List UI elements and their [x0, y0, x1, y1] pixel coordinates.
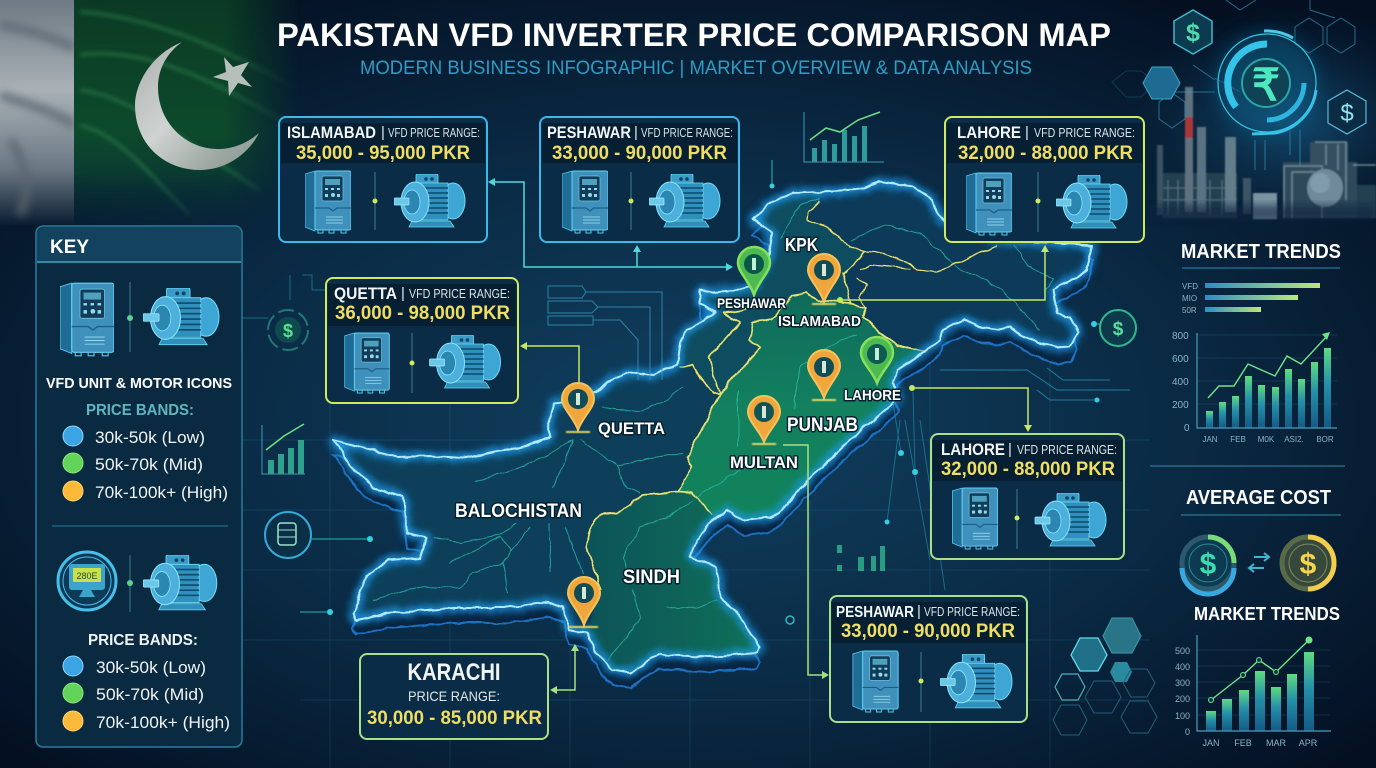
flag of Pakistan: [0, 0, 290, 224]
panel: Quetta prices: [326, 278, 518, 403]
small chart left: [262, 424, 305, 474]
map depth shadow: [333, 197, 1093, 688]
map labels: ISLAMABAD: [778, 313, 861, 330]
province: Balochistan: [333, 363, 720, 630]
bar and line chart: trends one: [1172, 331, 1337, 444]
panel: Karachi prices: PRICE RANGE:: [408, 688, 500, 704]
panel: Lahore prices (top): [945, 117, 1144, 242]
map pin: Karachi: [568, 577, 600, 628]
Lahore top connector: [840, 250, 1045, 300]
panel: Quetta prices: 36,000 - 98,000 PKR: [335, 303, 510, 324]
panel: Lahore prices (top): |: [1025, 124, 1029, 141]
map pin: Peshawar: [738, 247, 770, 295]
panel: Lahore prices (middle): VFD PRICE RANGE:: [1017, 442, 1117, 457]
map pin: Quetta: [562, 383, 594, 433]
panel: Quetta prices: |: [401, 285, 405, 302]
panel: Islamabad prices: [279, 117, 487, 242]
northern areas: [333, 182, 1093, 673]
bar and line chart: trends two: 0: [1185, 727, 1190, 737]
small decorative bars: [837, 545, 885, 571]
price bands legend two: 30k-50k (Low): [96, 658, 206, 677]
map labels: SINDH: [623, 567, 680, 588]
price bands legend one: 50k-70k (Mid): [95, 455, 203, 474]
panel: Karachi prices: 30,000 - 85,000 PKR: [367, 708, 542, 729]
dark hexagon filled: [1143, 67, 1180, 99]
dollar hexagon top: $: [1186, 19, 1200, 47]
map labels: PUNJAB: [787, 415, 858, 436]
bar and line chart: trends one: 600: [1172, 354, 1189, 365]
icon: dollar badge left: $: [283, 321, 293, 341]
map pin: Multan: [748, 396, 780, 445]
horizontal bar chart: MIO: [1182, 294, 1197, 303]
rivers: [373, 198, 1053, 660]
bar and line chart: trends two: 200: [1175, 694, 1190, 704]
map pin: Islamabad: [808, 254, 840, 305]
arrows: exchange: [1249, 553, 1269, 572]
panel: Islamabad prices: ISLAMABAD: [287, 123, 376, 142]
horizontal bar chart: [1182, 268, 1340, 315]
icon: dollar badge right: $: [1113, 319, 1124, 340]
icons: VFD and motor: [60, 282, 219, 356]
panel: Lahore prices (middle): [931, 434, 1124, 559]
dollar hexagon right: $: [1340, 100, 1354, 127]
price bands legend two: PRICE BANDS:: [88, 632, 198, 649]
bar and line chart: trends one: ASI2.: [1284, 435, 1304, 444]
bar and line chart: trends two: APR: [1299, 738, 1318, 748]
panel: Peshawar prices (lower): PESHAWAR: [836, 604, 914, 621]
connector lines and arrows: [240, 160, 1130, 694]
title: PAKISTAN VFD INVERTER PRICE COMPARISON MAP: [277, 17, 1111, 53]
Peshawar lower connector: [783, 445, 824, 675]
map labels: LAHORE: [844, 387, 901, 404]
bar and line chart: trends one: BOR: [1316, 435, 1334, 444]
dollar hexagon top: [1174, 10, 1212, 54]
bar and line chart: trends two: [1175, 635, 1331, 748]
coin: low cost: $: [1200, 548, 1217, 581]
province boundaries: [587, 200, 997, 590]
panel: Lahore prices (top): LAHORE: [957, 123, 1021, 142]
panel: Lahore prices (middle): 32,000 - 88,000 PKR: [941, 459, 1115, 480]
Islamabad and Peshawar connector: [492, 182, 727, 267]
coin: low cost: [1182, 537, 1234, 594]
price bands legend one: 70k-100k+ (High): [95, 483, 228, 502]
bar and line chart: trends one: 400: [1172, 377, 1189, 388]
subtitle: MODERN BUSINESS INFOGRAPHIC | MARKET OVERVIEW & DATA ANALYSIS: [360, 58, 1032, 79]
price bands legend two: [63, 632, 230, 732]
horizontal bar chart: 50R: [1182, 306, 1197, 315]
price bands legend two: 70k-100k+ (High): [96, 713, 230, 732]
bar and line chart: trends two: 100: [1175, 711, 1190, 721]
price bands legend two: 50k-70k (Mid): [96, 685, 204, 704]
map labels: QUETTA: [598, 419, 665, 438]
price bands legend one: 30k-50k (Low): [95, 428, 205, 447]
province: KPK: [677, 192, 865, 393]
Karachi connector: [554, 650, 575, 690]
hexagon cluster: [1053, 618, 1157, 735]
icons: meter and motor: [58, 552, 217, 612]
icon: database badge: [265, 512, 311, 558]
map labels: BALOCHISTAN: [455, 501, 582, 522]
bar and line chart: trends two: JAN: [1202, 738, 1220, 748]
panel: Peshawar prices (lower): 33,000 - 90,000 PKR: [841, 621, 1015, 642]
map pin: Punjab: [808, 350, 840, 401]
icon caption: VFD UNIT & MOTOR ICONS: [46, 375, 232, 392]
province: Punjab: [677, 293, 927, 520]
panel: Karachi prices: KARACHI: [408, 659, 500, 686]
bar and line chart: trends one: 0: [1184, 423, 1190, 434]
factory silhouette: [1157, 87, 1376, 219]
panel: Peshawar prices (lower): |: [917, 603, 921, 620]
data tags: [548, 286, 662, 380]
map pin: Lahore: [861, 337, 893, 383]
dollar hexagon right: [1328, 90, 1366, 134]
price bands legend one: PRICE BANDS:: [86, 402, 194, 419]
horizontal bar chart: VFD: [1182, 282, 1198, 291]
icon: dollar badge left: [268, 310, 308, 350]
bar and line chart: trends one: FEB: [1230, 435, 1246, 444]
Lahore mid connector: [912, 388, 1028, 426]
coin: high cost: [1282, 537, 1334, 589]
market trends heading two: MARKET TRENDS: [1194, 604, 1340, 624]
map labels: MULTAN: [730, 453, 798, 472]
panel: Islamabad prices: VFD PRICE RANGE:: [388, 125, 480, 140]
panel: Lahore prices (middle): |: [1008, 441, 1012, 458]
panel: Lahore prices (top): 32,000 - 88,000 PKR: [958, 143, 1133, 164]
panel: Lahore prices (top): VFD PRICE RANGE:: [1034, 125, 1135, 140]
small chart top: [804, 112, 884, 162]
panel: Peshawar prices (top): 33,000 - 90,000 PKR: [552, 143, 727, 164]
Quetta connector: [524, 346, 579, 382]
market trends heading: MARKET TRENDS: [1181, 241, 1341, 263]
panel: Peshawar prices (lower): VFD PRICE RANGE:: [924, 604, 1020, 619]
circuit lines: [940, 368, 1130, 400]
bar and line chart: trends one: JAN: [1202, 435, 1218, 444]
bar and line chart: trends two: FEB: [1234, 738, 1252, 748]
panel: Islamabad prices: 35,000 - 95,000 PKR: [296, 143, 470, 164]
map labels: KPK: [785, 235, 818, 255]
panel: Peshawar prices (top): [540, 117, 739, 242]
panel: Karachi prices: [360, 654, 548, 739]
bar and line chart: trends two: MAR: [1266, 738, 1286, 748]
price bands legend one: [63, 402, 228, 502]
bar and line chart: trends two: 500: [1175, 646, 1190, 656]
bar and line chart: trends two: 300: [1175, 678, 1190, 688]
panel: Lahore prices (middle): LAHORE: [941, 440, 1005, 459]
bar and line chart: trends one: 800: [1172, 331, 1189, 342]
glowing border: [333, 182, 1093, 673]
panel: key: [36, 226, 242, 747]
map labels: PESHAWAR: [717, 295, 786, 311]
panel: Quetta prices: QUETTA: [334, 284, 397, 303]
panel: Quetta prices: VFD PRICE RANGE:: [409, 286, 510, 301]
rupee dial: [1215, 31, 1319, 135]
key heading: KEY: [50, 237, 89, 258]
rupee dial: ₹: [1252, 61, 1280, 110]
map of Pakistan: [333, 182, 1093, 688]
panel: Peshawar prices (lower): [830, 596, 1027, 722]
map labels: [455, 235, 901, 588]
panel: Islamabad prices: |: [381, 124, 385, 141]
icon: dollar badge right: [1100, 310, 1136, 346]
panel: Peshawar prices (top): PESHAWAR: [547, 123, 631, 142]
panel: Peshawar prices (top): VFD PRICE RANGE:: [641, 125, 733, 140]
hexagon network: [1112, 0, 1355, 170]
panel: Peshawar prices (top): |: [634, 124, 638, 141]
average cost heading: AVERAGE COST: [1186, 487, 1331, 509]
bar and line chart: trends one: 200: [1172, 400, 1189, 411]
bar and line chart: trends two: 400: [1175, 662, 1190, 672]
bar and line chart: trends one: M0K: [1258, 435, 1275, 444]
province: Sindh: [568, 492, 760, 673]
industrial skyline and finance graphics: [1112, 0, 1376, 221]
icons: meter and motor: 280E: [76, 571, 98, 581]
coin: high cost: $: [1300, 548, 1317, 581]
